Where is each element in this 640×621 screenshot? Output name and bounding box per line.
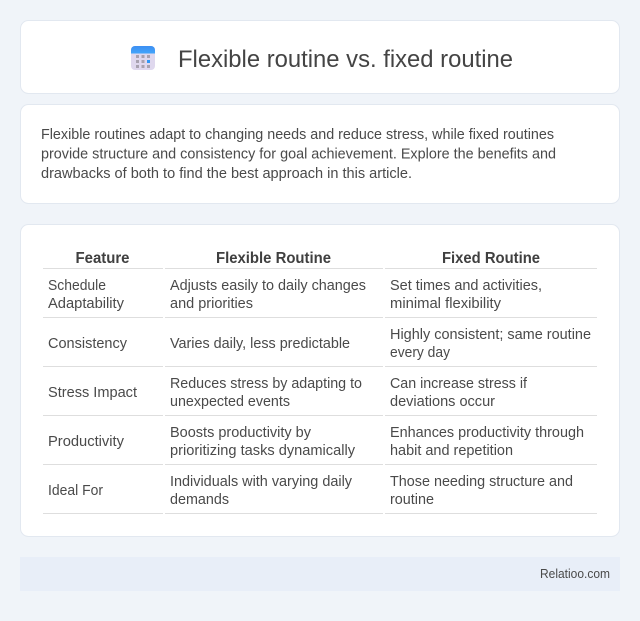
table row: ideal for bbox=[48, 474, 573, 508]
table row: stress impact bbox=[48, 376, 528, 410]
text block: introduction: provide structure and consistency for goal achievement. Explore the benefits and bbox=[41, 146, 556, 162]
table row: schedule adaptability: Adaptability bbox=[48, 296, 125, 312]
table row: ideal for: demands bbox=[170, 492, 229, 508]
title: Flexible routine vs. fixed routine bbox=[178, 46, 513, 73]
table row: productivity: Productivity bbox=[48, 434, 125, 450]
table row: consistency: Varies daily, less predictable bbox=[170, 336, 350, 352]
table row: ideal for: Ideal For bbox=[48, 483, 103, 499]
table row: schedule adaptability: and priorities bbox=[170, 296, 253, 312]
table row: schedule adaptability: minimal flexibility bbox=[390, 296, 502, 312]
table header row: Feature bbox=[76, 250, 130, 267]
text block: introduction: Flexible routines adapt to changing needs and reduce stress, while fixed routines bbox=[41, 127, 554, 143]
table row: consistency: Consistency bbox=[48, 336, 128, 352]
footer credit: Relatioo.com bbox=[540, 567, 610, 581]
table row: stress impact: deviations occur bbox=[390, 394, 495, 410]
footer bar bbox=[20, 557, 620, 591]
table row: stress impact: Can increase stress if bbox=[390, 376, 528, 392]
table row: schedule adaptability: Set times and activities, bbox=[390, 278, 542, 294]
panel: title header bbox=[20, 20, 620, 94]
table row: stress impact: Reduces stress by adapting to bbox=[170, 376, 362, 392]
table row: stress impact: Stress Impact bbox=[48, 385, 137, 401]
table row: schedule adaptability: Adjusts easily to daily changes bbox=[170, 278, 366, 294]
table row: ideal for: Those needing structure and bbox=[390, 474, 573, 490]
table header row bbox=[76, 250, 540, 267]
table row: productivity: habit and repetition bbox=[390, 443, 513, 459]
table row: consistency: every day bbox=[390, 345, 451, 361]
table row: productivity: Enhances productivity through bbox=[390, 425, 584, 441]
table row: schedule adaptability bbox=[48, 278, 542, 312]
table header row: Flexible Routine bbox=[216, 250, 331, 267]
table row: stress impact: unexpected events bbox=[170, 394, 290, 410]
table row: consistency bbox=[48, 327, 591, 361]
table row: productivity: prioritizing tasks dynamically bbox=[170, 443, 356, 459]
icon: calendar bbox=[131, 46, 155, 70]
panel: introduction bbox=[20, 104, 620, 204]
text block: introduction: drawbacks of both to find the best approach in this article. bbox=[41, 166, 412, 182]
text block: introduction bbox=[41, 127, 556, 182]
table row: schedule adaptability: Schedule bbox=[48, 278, 106, 294]
table row: productivity bbox=[48, 425, 584, 459]
table row: ideal for: routine bbox=[390, 492, 434, 508]
table row: productivity: Boosts productivity by bbox=[170, 425, 312, 441]
table header row: Fixed Routine bbox=[442, 250, 540, 267]
table row: ideal for: Individuals with varying daily bbox=[170, 474, 353, 490]
panel: comparison table bbox=[20, 224, 620, 536]
table row: consistency: Highly consistent; same routine bbox=[390, 327, 591, 343]
